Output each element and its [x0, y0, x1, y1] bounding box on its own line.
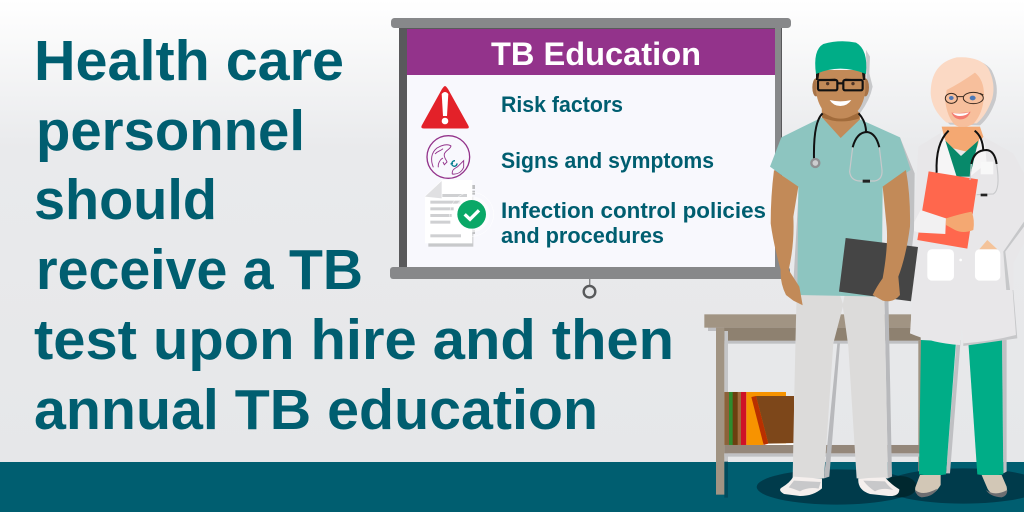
pockets: [927, 249, 954, 281]
headline: [34, 29, 674, 442]
doctor face: [945, 73, 984, 127]
screen header: TB Education: [491, 36, 701, 72]
top roller: [391, 18, 791, 28]
eyebrows: [823, 79, 857, 81]
headline: Health care: [34, 29, 344, 93]
books: [724, 392, 794, 445]
headline: should: [34, 168, 217, 232]
table with books: [704, 314, 922, 498]
cap shadow: [857, 50, 873, 113]
surgical cap: [815, 41, 866, 74]
doctor upper body: [910, 57, 1024, 330]
bottom roller: [390, 267, 790, 279]
nurse lower body: [780, 293, 899, 496]
doctor glasses: [945, 92, 983, 104]
neck: [822, 105, 860, 138]
table shelf: [724, 453, 921, 457]
coat sleeve shade: [1003, 222, 1024, 317]
headline: personnel: [36, 99, 305, 163]
icon: coughing person: [427, 136, 470, 178]
lab coat: [911, 133, 1024, 330]
headline: annual TB education: [34, 378, 598, 442]
doctor stethoscope: [937, 131, 998, 196]
grey trousers: [793, 293, 843, 478]
left arm with hand: [873, 170, 910, 301]
screen frame: [399, 27, 782, 273]
green scrub top: [945, 141, 978, 177]
body shadow: [893, 137, 915, 297]
floor band: [0, 462, 1024, 512]
sideburns: [816, 73, 865, 80]
doctor lower body: [915, 340, 1007, 497]
table legs: [724, 331, 728, 462]
screen panel: [407, 29, 775, 267]
nurse upper body: [770, 41, 918, 305]
black clipboard: [839, 238, 918, 301]
headline: receive a TB: [36, 238, 363, 302]
pull cord: [584, 279, 595, 298]
doctor coat skirt: [910, 290, 1017, 346]
screen header: [407, 29, 775, 75]
headline: test upon hire and then: [34, 308, 674, 372]
sleeve and hand: [910, 210, 946, 234]
sneakers: [780, 477, 822, 496]
nurse head: [816, 70, 865, 119]
projection screen: [390, 18, 791, 298]
floor shadows: [757, 468, 1024, 505]
clogs: [915, 475, 941, 497]
figure: female doctor: [910, 57, 1024, 497]
right arm: [771, 170, 803, 305]
nurse stethoscope: [811, 113, 882, 183]
red clipboard: [917, 171, 978, 249]
nurse smile: [830, 100, 851, 106]
icon: policy document with check: [425, 180, 494, 247]
coat lapels: [937, 132, 957, 177]
ears: [812, 78, 820, 96]
scrub top: [770, 117, 911, 297]
nurse glasses: [818, 80, 863, 90]
screen list text: [501, 92, 766, 248]
screen list text: Risk factors: [501, 92, 623, 117]
screen list text: Signs and symptoms: [501, 148, 714, 173]
trouser shadows: [884, 293, 892, 478]
green trousers: [946, 340, 961, 473]
figure: male nurse: [770, 41, 918, 496]
screen list text: and procedures: [501, 223, 664, 248]
table top: [708, 318, 921, 331]
doctor smile: [951, 112, 971, 119]
neck and chest: [942, 127, 983, 153]
hair back: [934, 59, 997, 125]
icon: warning triangle: [421, 86, 469, 128]
screen list text: Infection control policies: [501, 198, 766, 223]
